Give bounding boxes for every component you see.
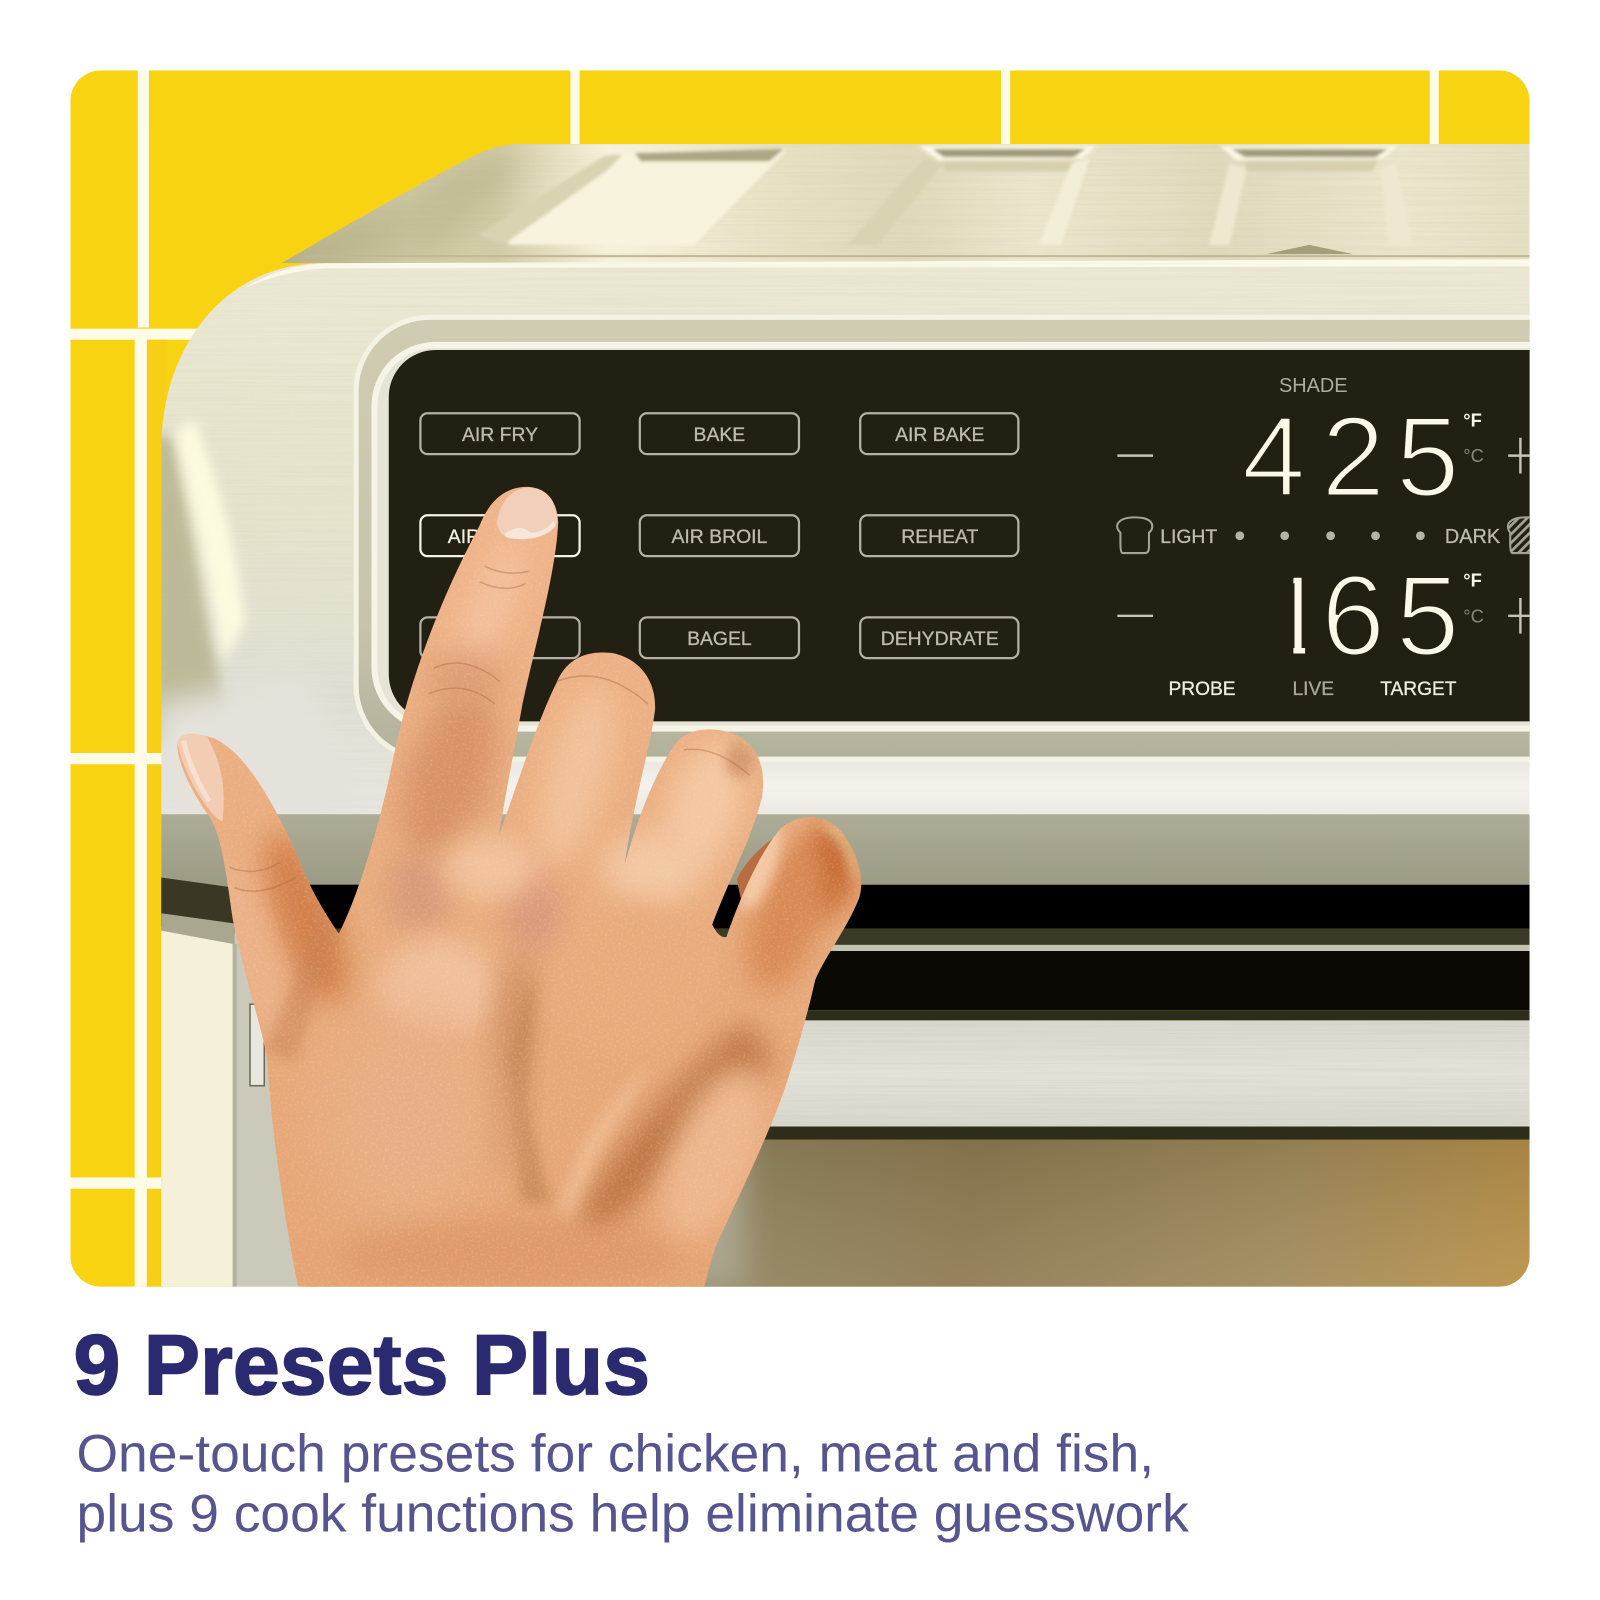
probe, live and target labels: TARGET: [1380, 679, 1457, 700]
preset labels: DEHYDRATE: [881, 628, 999, 650]
thumb nail: [178, 734, 224, 821]
display bezel: [356, 317, 1600, 759]
photo panel: oven and hand: [70, 70, 1600, 1296]
icon: light toast: [1117, 517, 1152, 553]
skin texture: [163, 480, 878, 1296]
oven front body: [153, 259, 1530, 902]
oven door bands: [306, 721, 1530, 1287]
shade scale: [1162, 528, 1500, 544]
preset labels: REHEAT: [901, 526, 979, 548]
probe, live and target labels: [1170, 681, 1456, 696]
shading: [248, 822, 364, 1014]
shade scale: DARK: [1445, 526, 1501, 548]
yellow tile wall: [70, 70, 1530, 1287]
preset labels: AIR ROAST: [448, 526, 552, 548]
unit labels: [1463, 410, 1484, 626]
unit labels: °C: [1463, 605, 1484, 626]
icon: dark toast: [1506, 516, 1530, 554]
oven lower left side panel: [161, 878, 314, 1287]
unit labels: °C: [1463, 445, 1484, 466]
description text: plus 9 cook functions help eliminate guesswork: [77, 1485, 1189, 1544]
control panel: [389, 350, 1600, 721]
readout masks: [1274, 578, 1321, 654]
top temperature readout: 425: [1242, 394, 1459, 521]
unit labels: °F: [1463, 410, 1482, 431]
probe, live and target labels: LIVE: [1292, 679, 1334, 700]
oven top with vents: [276, 144, 1530, 263]
heading: 9 Presets Plus: [73, 1317, 650, 1413]
curled pinky underside: [736, 838, 773, 900]
preset labels: BAKE: [694, 424, 745, 446]
description text: [77, 1424, 1189, 1544]
description text: One-touch presets for chicken, meat and fish,: [77, 1424, 1154, 1483]
bottom temperature readout: 165: [1264, 553, 1459, 680]
probe, live and target labels: PROBE: [1168, 679, 1236, 700]
preset labels: BAGEL: [687, 628, 752, 650]
preset labels: [448, 424, 999, 650]
minus and plus controls: [1117, 438, 1530, 634]
index fingernail: [497, 488, 557, 539]
preset labels: AIR FRY: [462, 424, 538, 446]
preset labels: TOAST: [468, 628, 532, 650]
unit labels: °F: [1463, 570, 1482, 591]
hand: [163, 480, 878, 1296]
preset buttons: [420, 413, 1018, 658]
finger creases: [230, 566, 750, 891]
shade scale: LIGHT: [1160, 526, 1217, 548]
preset labels: AIR BROIL: [671, 526, 768, 548]
preset labels: AIR BAKE: [895, 424, 985, 446]
shade label: SHADE: [1279, 375, 1348, 397]
